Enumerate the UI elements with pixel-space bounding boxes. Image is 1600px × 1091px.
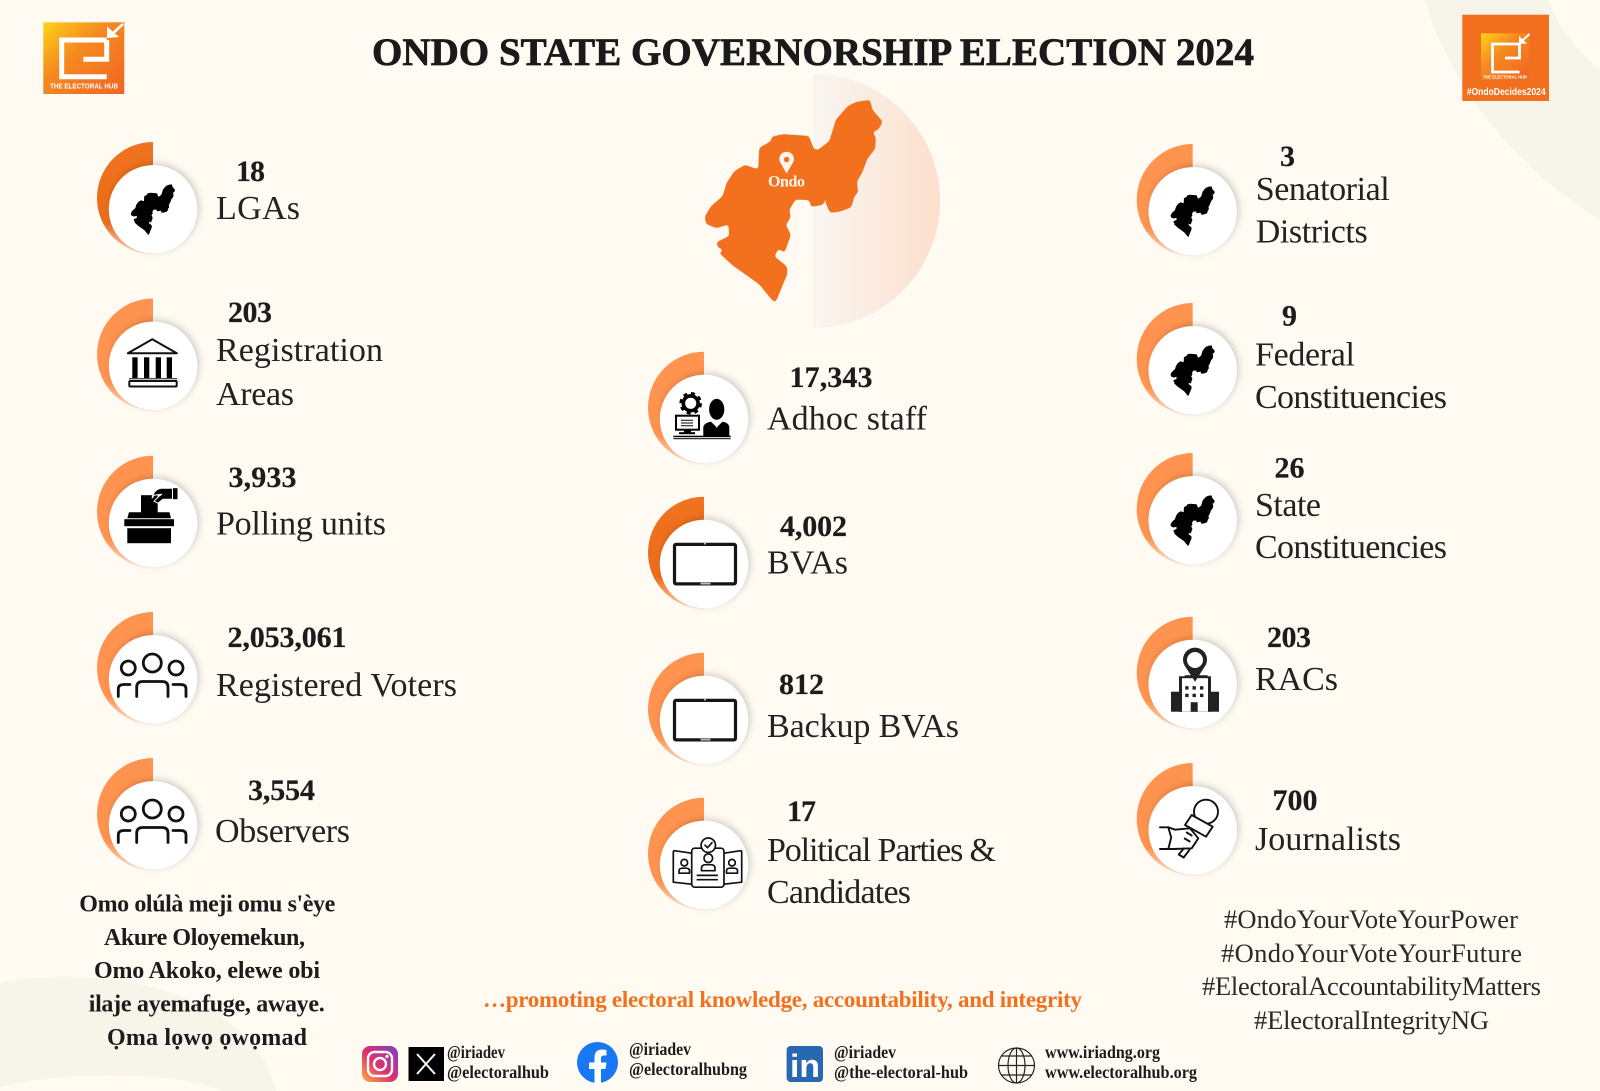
Yoruba verse: Omo olúlà meji omu s'èye bbox=[79, 892, 336, 918]
stat: 3,554 Observers bbox=[97, 758, 350, 870]
stat: 18 LGAs: 18 bbox=[236, 155, 265, 188]
stat: 3 Senatorial Districts: Senatorial bbox=[1256, 171, 1390, 208]
stat: 203 Registration Areas: Areas bbox=[216, 376, 294, 413]
map of Ondo state with semicircle backdrop bbox=[706, 74, 940, 328]
stat: 17 Political Parties & Candidates bbox=[648, 795, 996, 911]
hashtags: #OndoYourVoteYourFuture bbox=[1221, 938, 1522, 968]
handles: Facebook: @electoralhubng bbox=[629, 1059, 747, 1079]
stat: 2,053,061 Registered Voters: Registered Voters bbox=[216, 667, 457, 704]
handles: LinkedIn bbox=[834, 1042, 968, 1082]
Yoruba verse: ilaje ayemafuge, awaye. bbox=[89, 992, 325, 1018]
Yoruba verse: Ọma lọwọ ọwọmad bbox=[107, 1025, 308, 1051]
stat: 26 State Constituencies bbox=[1137, 452, 1447, 566]
stat: 4,002 BVAs bbox=[648, 497, 848, 609]
logo: The Electoral Hub: THE ELECTORAL HUB bbox=[50, 84, 118, 91]
stat: 3 Senatorial Districts: 3 bbox=[1280, 140, 1295, 173]
icon: LinkedIn: in bbox=[790, 1048, 820, 1084]
logo: #OndoDecides2024: #OndoDecides2024 bbox=[1467, 86, 1546, 98]
handles: X and Instagram: @electoralhub bbox=[447, 1062, 549, 1082]
stat: 26 State Constituencies: State bbox=[1255, 487, 1321, 524]
stat: 26 State Constituencies: Constituencies bbox=[1255, 529, 1447, 566]
stat: 3,554 Observers: 3,554 bbox=[248, 774, 315, 807]
stat: 812 Backup BVAs bbox=[648, 653, 959, 765]
websites: www.electoralhub.org bbox=[1045, 1062, 1197, 1082]
stat: 9 Federal Constituencies: Federal bbox=[1255, 336, 1355, 374]
stat: 9 Federal Constituencies: Constituencies bbox=[1255, 379, 1447, 416]
stat: 203 RACs bbox=[1137, 617, 1338, 729]
stat: 700 Journalists: 700 bbox=[1272, 784, 1318, 817]
handles: X and Instagram bbox=[447, 1042, 549, 1082]
stat: 9 Federal Constituencies bbox=[1137, 300, 1447, 416]
hashtags: #ElectoralIntegrityNG bbox=[1254, 1005, 1489, 1035]
stat: 17 Political Parties & Candidates: Political Parties & bbox=[767, 832, 996, 869]
handles: X and Instagram: @iriadev bbox=[447, 1042, 505, 1062]
stat: 203 RACs: 203 bbox=[1267, 621, 1311, 654]
stat: 18 LGAs: LGAs bbox=[216, 190, 300, 227]
stat: 17 Political Parties & Candidates: 17 bbox=[787, 795, 816, 828]
handles: LinkedIn: @the-electoral-hub bbox=[834, 1062, 968, 1082]
handles: Facebook: @iriadev bbox=[629, 1039, 691, 1059]
hashtags: #OndoYourVoteYourPower bbox=[1224, 904, 1518, 934]
stat: 203 Registration Areas bbox=[97, 296, 383, 413]
icon: Instagram bbox=[362, 1046, 398, 1082]
stat: 3,933 Polling units: Polling units bbox=[216, 506, 386, 542]
stat: 4,002 BVAs: 4,002 bbox=[780, 510, 847, 543]
icon: Facebook bbox=[577, 1042, 618, 1083]
stat: 3,933 Polling units bbox=[97, 456, 386, 568]
websites bbox=[1045, 1042, 1197, 1082]
logo: #OndoDecides2024 bbox=[1462, 15, 1549, 101]
logo: #OndoDecides2024: THE ELECTORAL HUB bbox=[1483, 75, 1528, 80]
stat: 2,053,061 Registered Voters bbox=[97, 612, 457, 724]
stat: 700 Journalists bbox=[1137, 763, 1401, 875]
stat: 203 Registration Areas: Registration bbox=[216, 332, 383, 369]
stat: 9 Federal Constituencies: 9 bbox=[1282, 300, 1297, 332]
hashtags bbox=[1202, 904, 1541, 1035]
stat: 17,343 Adhoc staff: Adhoc staff bbox=[767, 400, 928, 438]
Yoruba verse: Akure Oloyemekun, bbox=[104, 925, 305, 951]
handles: Facebook bbox=[629, 1039, 747, 1079]
icon: globe bbox=[998, 1048, 1034, 1083]
stat: 812 Backup BVAs: 812 bbox=[779, 668, 824, 701]
logo: The Electoral Hub bbox=[43, 22, 124, 94]
stat: 17,343 Adhoc staff: 17,343 bbox=[790, 361, 872, 394]
stat: 3,554 Observers: Observers bbox=[215, 813, 350, 850]
stat: 17,343 Adhoc staff bbox=[648, 352, 928, 464]
stat: 17 Political Parties & Candidates: Candidates bbox=[767, 874, 911, 911]
stat: 26 State Constituencies: 26 bbox=[1274, 452, 1304, 484]
stat: 203 Registration Areas: 203 bbox=[228, 296, 272, 329]
icon: X bbox=[408, 1047, 444, 1081]
hashtags: #ElectoralAccountabilityMatters bbox=[1202, 971, 1541, 1001]
handles: LinkedIn: @iriadev bbox=[834, 1042, 896, 1062]
stat: 2,053,061 Registered Voters: 2,053,061 bbox=[228, 621, 346, 654]
stat: 700 Journalists: Journalists bbox=[1255, 821, 1401, 858]
websites: www.iriadng.org bbox=[1045, 1042, 1160, 1062]
stat: 18 LGAs bbox=[97, 142, 300, 254]
Yoruba verse: Omo Akoko, elewe obi bbox=[94, 958, 320, 984]
stat: 3 Senatorial Districts: Districts bbox=[1256, 214, 1368, 251]
tagline: …promoting electoral knowledge, accountability, and integrity bbox=[483, 987, 1082, 1012]
stat: 3 Senatorial Districts bbox=[1137, 140, 1390, 256]
stat: 4,002 BVAs: BVAs bbox=[767, 544, 848, 582]
map of Ondo state with semicircle backdrop: Ondo bbox=[768, 174, 805, 191]
title: ONDO STATE GOVERNORSHIP ELECTION 2024 bbox=[372, 30, 1254, 74]
stat: 3,933 Polling units: 3,933 bbox=[228, 461, 296, 494]
stat: 203 RACs: RACs bbox=[1255, 661, 1338, 698]
stat: 812 Backup BVAs: Backup BVAs bbox=[767, 708, 959, 745]
Yoruba verse bbox=[79, 892, 336, 1051]
